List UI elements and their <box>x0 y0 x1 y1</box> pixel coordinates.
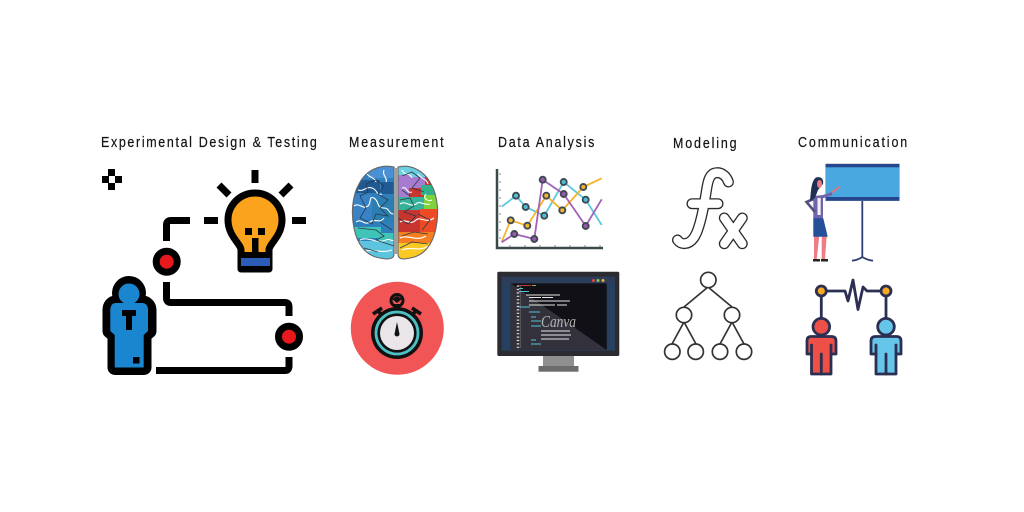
icon: connected people <box>807 280 901 374</box>
person: red <box>807 318 836 374</box>
heading: Data Analysis: Data Analysis <box>498 134 595 150</box>
watermark: Canva: Canva <box>541 312 576 331</box>
heading: Communication: Communication <box>798 134 907 150</box>
icon: computer monitor with code <box>497 272 619 372</box>
connector: upper dashed path <box>166 220 190 241</box>
icon: presenter with board <box>806 164 899 262</box>
heading: Modeling: Modeling <box>673 135 737 151</box>
infographic canvas <box>102 136 906 376</box>
connector: node two <box>278 326 300 347</box>
connector: lower path <box>156 357 289 370</box>
signal line <box>821 280 886 318</box>
presenter figure <box>806 177 840 262</box>
heading: Experimental Design & Testing: Experimental Design & Testing <box>101 134 317 150</box>
icon: light bulb <box>204 170 306 269</box>
connector: node one <box>156 251 177 272</box>
icon: small checker cross <box>102 169 122 190</box>
series: orange <box>502 178 602 242</box>
presentation board <box>826 164 899 261</box>
icon: blue person <box>110 276 149 368</box>
icon: colourful brain <box>350 165 440 261</box>
icon: function fx symbol <box>678 173 742 244</box>
heading: Measurement: Measurement <box>349 134 444 150</box>
icon: tree diagram <box>665 272 752 359</box>
chart markers <box>508 177 589 242</box>
monitor stand <box>538 355 578 372</box>
signal nodes <box>816 286 891 296</box>
person: blue <box>871 318 901 374</box>
code lines <box>518 286 571 348</box>
icon: stopwatch on red circle <box>351 282 444 375</box>
connector: middle path <box>166 282 289 316</box>
series: teal <box>502 182 602 225</box>
icon: person with idea process <box>110 170 306 370</box>
series: purple <box>502 180 602 242</box>
chart: line chart <box>497 169 603 248</box>
